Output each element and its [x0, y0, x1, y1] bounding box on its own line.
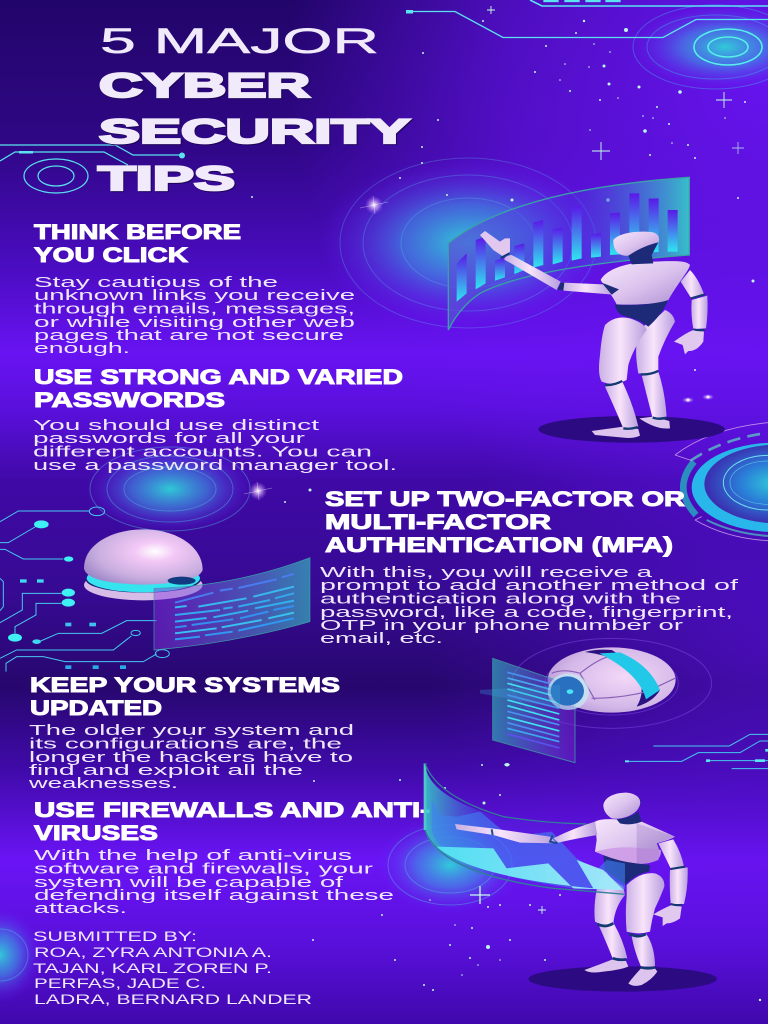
tip 5: heading: USE FIREWALLS AND ANTI- — [34, 799, 430, 822]
tip 3: body: With this, you will receive a — [320, 565, 654, 581]
tip 5: body: attacks. — [34, 901, 127, 917]
tip 3: body: authentication along with the — [320, 592, 681, 608]
tip 2: heading: USE STRONG AND VARIED — [34, 366, 403, 389]
tip 4: heading: KEEP YOUR SYSTEMS — [30, 674, 340, 697]
tip 1: body: unknown links you receive — [34, 288, 355, 304]
tip 4: body — [27, 723, 354, 792]
title: TIPS — [98, 160, 235, 198]
tip 4: heading: UPDATED — [30, 697, 162, 720]
title: SECURITY — [99, 113, 411, 151]
glints — [244, 196, 714, 500]
tip 1: body: Stay cautious of the — [34, 275, 278, 291]
robot torso and head — [553, 793, 675, 864]
tip 4: body: weaknesses. — [27, 776, 178, 792]
tip 2: body: use a password manager tool. — [33, 458, 397, 474]
credits: LADRA, BERNARD LANDER — [34, 992, 312, 1007]
eye body — [548, 647, 676, 713]
tip 1: heading: THINK BEFORE — [34, 221, 241, 244]
robot legs and waist — [584, 839, 688, 986]
tip 3: heading: AUTHENTICATION (MFA) — [325, 534, 673, 557]
dome device with code panel — [84, 529, 310, 650]
tip 4: body: The older your system and — [29, 723, 354, 739]
tip 4: heading — [30, 674, 340, 720]
eye seams — [552, 657, 675, 700]
tip 3: body — [320, 565, 740, 647]
dome top — [84, 529, 203, 585]
eye device with list panel — [480, 638, 712, 766]
robot with area chart screen — [425, 763, 717, 992]
tip 3: heading — [325, 488, 685, 557]
tip 4: body: find and exploit all the — [29, 763, 303, 779]
screen, bars and shadow — [448, 177, 725, 443]
glow rings: centre left — [85, 445, 255, 533]
pointing arm — [480, 231, 619, 295]
tip 5: heading — [34, 799, 430, 845]
tip 1: heading — [34, 221, 241, 267]
title — [98, 22, 411, 198]
tip 5: body: system will be capable of — [34, 875, 345, 891]
tip 3: body: password, like a code, fingerprint, — [320, 605, 733, 621]
tip 1: heading: YOU CLICK — [34, 244, 188, 267]
tip 2: body: different accounts. You can — [33, 444, 372, 460]
lens — [548, 673, 589, 710]
shadow — [528, 966, 717, 992]
tip 4: body: its configurations are, the — [29, 736, 342, 752]
code panel — [154, 558, 310, 650]
extended forearm — [455, 824, 557, 843]
credits: TAJAN, KARL ZOREN P. — [33, 961, 272, 976]
eye cyan band — [599, 652, 660, 699]
circuit: left board — [0, 507, 169, 672]
tip 3: body: prompt to add another method of — [320, 578, 740, 594]
glow rings: bottom screen — [375, 815, 525, 915]
tip 2: heading: PASSWORDS — [34, 389, 225, 412]
tip 5: body: software and firewalls, your — [34, 862, 373, 878]
tip 2: body: You should use distinct — [33, 418, 319, 434]
tip 2: body — [33, 418, 397, 474]
tip 5: body: defending itself against these — [34, 888, 394, 904]
dome base — [84, 570, 203, 600]
lens — [168, 577, 196, 585]
glow rings: behind first robot — [318, 157, 618, 329]
title: 5 MAJOR — [100, 22, 379, 61]
tip 5: body: With the help of anti-virus — [34, 848, 352, 864]
tip 4: body: longer the hackers have to — [29, 750, 353, 766]
circuit: right lower lines — [625, 734, 768, 769]
tip 2: body: passwords for all your — [33, 431, 305, 447]
tip 3: body: OTP in your phone number or — [320, 618, 683, 634]
faint rings — [512, 638, 712, 728]
credits — [33, 929, 312, 1007]
credits: ROA, ZYRA ANTONIA A. — [34, 945, 272, 960]
list panel — [493, 658, 575, 763]
robot with bar chart screen — [448, 177, 725, 443]
tip 1: body — [34, 275, 355, 357]
circuit: top right lines — [406, 0, 768, 38]
tip 2: heading — [34, 366, 403, 412]
eye dark patches — [585, 650, 660, 707]
robot body — [592, 232, 708, 438]
curved area screen — [425, 763, 627, 894]
stars — [251, 20, 761, 1001]
tip 5: heading: VIRUSES — [34, 822, 158, 845]
glow rings: bottom left — [0, 907, 42, 1003]
tip 1: body: through emails, messages, — [34, 302, 355, 318]
tip 1: body: pages that are not secure — [34, 328, 344, 344]
glow rings: top right — [629, 3, 768, 91]
tip 5: body — [34, 848, 394, 917]
sparkles — [470, 6, 744, 914]
tip 3: body: email, etc. — [320, 631, 443, 647]
credits: SUBMITTED BY: — [33, 929, 197, 944]
title: CYBER — [99, 67, 310, 105]
tip 3: heading: MULTI-FACTOR — [325, 511, 551, 534]
credits: PERFAS, JADE C. — [34, 976, 206, 991]
gauge: right edge — [675, 423, 768, 541]
tip 1: body: enough. — [34, 341, 130, 357]
tip 3: heading: SET UP TWO-FACTOR OR — [325, 488, 685, 511]
circuit: title lines and target — [0, 145, 185, 193]
tip 1: body: or while visiting other web — [34, 315, 355, 331]
